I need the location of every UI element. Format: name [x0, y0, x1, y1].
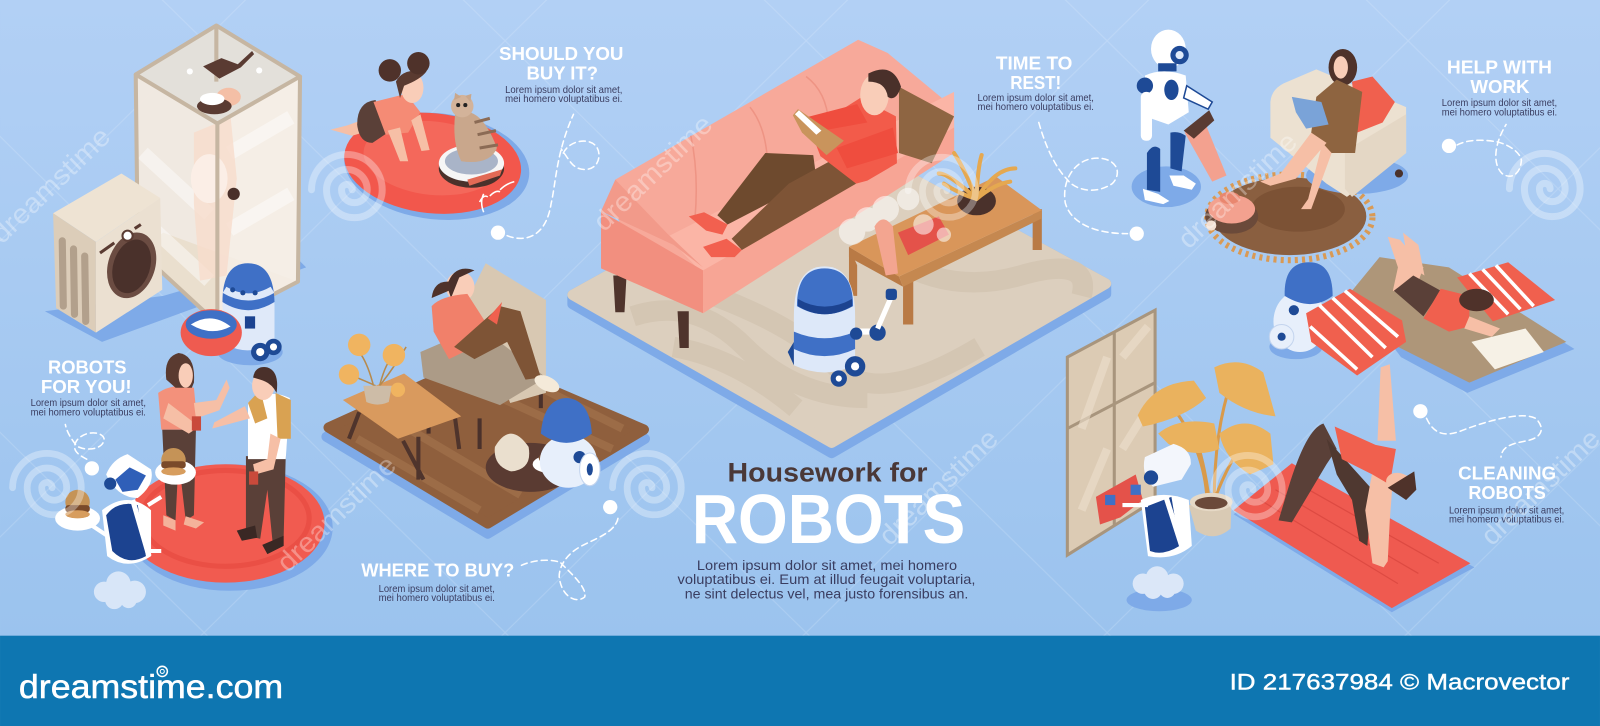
heading: should you buy it: BUY IT? [527, 63, 598, 84]
shower cabin [136, 26, 300, 323]
heading: robots for you [31, 356, 146, 418]
red book on table [898, 216, 949, 255]
scene: robot serving burgers to a couple [55, 353, 333, 609]
heading: should you buy it [499, 43, 623, 105]
heading: should you buy it: SHOULD YOU [499, 43, 623, 64]
washing machine [53, 173, 164, 333]
burger on tray right [155, 448, 196, 485]
serving robot [92, 454, 161, 564]
footer bar [0, 636, 1600, 726]
woman on all fours [331, 52, 430, 161]
main title: Lorem ipsum dolor sit amet, mei homero [697, 558, 957, 574]
watermark: dreamstime [1171, 126, 1303, 254]
cleaning robot [788, 266, 897, 387]
woman in triangle pose [1279, 364, 1417, 567]
heading: cleaning robots: mei homero voluptatibus ei. [1449, 514, 1564, 525]
open book [1471, 329, 1544, 369]
man talking [212, 367, 291, 554]
heading: should you buy it: Lorem ipsum dolor sit amet, [505, 85, 622, 96]
heading: should you buy it: mei homero voluptatibus ei. [505, 94, 622, 105]
cloud under robot [94, 571, 146, 609]
heading: where to buy: mei homero voluptatibus ei. [379, 593, 495, 604]
seated woman reading [1260, 49, 1362, 209]
scene: shower and washing machine [45, 26, 306, 365]
watermark [0, 108, 1600, 578]
foam and sponge [187, 67, 262, 114]
armchair [420, 263, 546, 449]
watermark: dreamstime [587, 108, 718, 237]
scene: yoga woman on mat [1234, 364, 1474, 612]
heading: help with work: mei homero voluptatibus ei. [1442, 107, 1557, 118]
main title: voluptatibus ei. Eum at illud feugait voluptaria, [678, 572, 976, 588]
main title: ROBOTS [692, 480, 965, 558]
scene: woman lying on blanket with robot [1269, 233, 1574, 393]
heading: time to rest: mei homero voluptatibus ei. [978, 102, 1094, 113]
main title [678, 458, 976, 602]
red cloth [1096, 474, 1143, 524]
connector: cleaning robots [1413, 404, 1541, 457]
watermark: dreamstime [872, 423, 1004, 551]
scene: man on sofa with cleaning robot [572, 40, 1106, 453]
scene: robot vacuuming and woman in armchair [1132, 30, 1408, 260]
side table with flowers [339, 334, 461, 480]
carpet [572, 143, 1106, 453]
armchair [1270, 69, 1408, 197]
watermark: dreamstime [270, 449, 402, 578]
heading: robots for you: Lorem ipsum dolor sit amet, [31, 398, 146, 409]
heading: help with work [1442, 56, 1557, 118]
connector: should you buy it [491, 114, 599, 240]
tea tray, teapot and robot [486, 398, 600, 492]
heading: time to rest: Lorem ipsum dolor sit amet, [978, 93, 1094, 104]
heading: help with work: HELP WITH [1447, 56, 1552, 77]
blanket [1355, 262, 1574, 393]
red round rug [127, 464, 333, 591]
lying woman [1388, 233, 1500, 337]
connector: where to buy [521, 500, 618, 600]
heading: robots for you: mei homero voluptatibus ei. [31, 407, 146, 418]
heading: robots for you: ROBOTS [48, 356, 127, 377]
robot behind pillow [1269, 262, 1333, 359]
humanoid robot [1132, 30, 1212, 207]
connector: time to rest [1039, 122, 1144, 241]
heading: time to rest [978, 52, 1094, 113]
heading: time to rest: REST! [1010, 72, 1061, 93]
heading: time to rest: TIME TO [996, 52, 1072, 73]
scene: window cleaning robot and plant [1067, 310, 1275, 611]
yoga mat [1234, 463, 1474, 612]
watermark: dreamstime [1474, 423, 1600, 551]
image id and credit: ID 217637984 © Macrovector [1230, 669, 1570, 694]
robot with laundry basket [181, 263, 283, 365]
heading: where to buy [361, 560, 514, 604]
connector: robots for you [65, 424, 104, 475]
heading: where to buy: Lorem ipsum dolor sit amet, [379, 584, 495, 595]
heading: cleaning robots: ROBOTS [1468, 482, 1546, 503]
sofa [601, 40, 954, 348]
footer logo: dreamstime.com [19, 669, 283, 706]
pillow [899, 87, 954, 163]
burger on tray left [55, 490, 100, 531]
red round rug [339, 104, 535, 229]
woman talking [158, 353, 230, 531]
cloud under robot [1127, 566, 1192, 611]
window robot [1105, 444, 1192, 557]
house plant [1138, 362, 1275, 536]
connector: help with work [1442, 124, 1521, 176]
scene: woman reading in armchair on wood floor [327, 263, 645, 534]
heading: cleaning robots [1449, 463, 1564, 525]
dust clouds [839, 188, 951, 245]
reading woman [432, 269, 562, 396]
man reading [689, 69, 901, 257]
heading: where to buy: WHERE TO BUY? [361, 560, 514, 581]
heading: help with work: Lorem ipsum dolor sit amet, [1442, 98, 1557, 109]
cat [451, 93, 498, 162]
window [1067, 310, 1155, 555]
heading: help with work: WORK [1470, 76, 1530, 97]
main title: ne sint delectus vel, mea justo forensibus an. [685, 586, 968, 602]
brown round rug [1207, 174, 1372, 260]
potted plant [939, 153, 1015, 215]
striped pillow back [1457, 262, 1555, 321]
heading: cleaning robots: Lorem ipsum dolor sit amet, [1449, 505, 1564, 516]
robot vacuum [439, 145, 514, 212]
upright vacuum [1184, 110, 1258, 234]
scene: crawling woman, cat and robot vacuum [331, 52, 535, 229]
icon: shower head [203, 51, 254, 79]
heading: robots for you: FOR YOU! [41, 376, 132, 397]
heading: cleaning robots: CLEANING [1458, 463, 1556, 484]
main title: Housework for [728, 458, 928, 488]
coffee table [849, 177, 1042, 324]
striped pillow front [1306, 289, 1406, 375]
shower knob [228, 188, 240, 200]
duster [874, 219, 898, 276]
wood floor [327, 359, 645, 534]
